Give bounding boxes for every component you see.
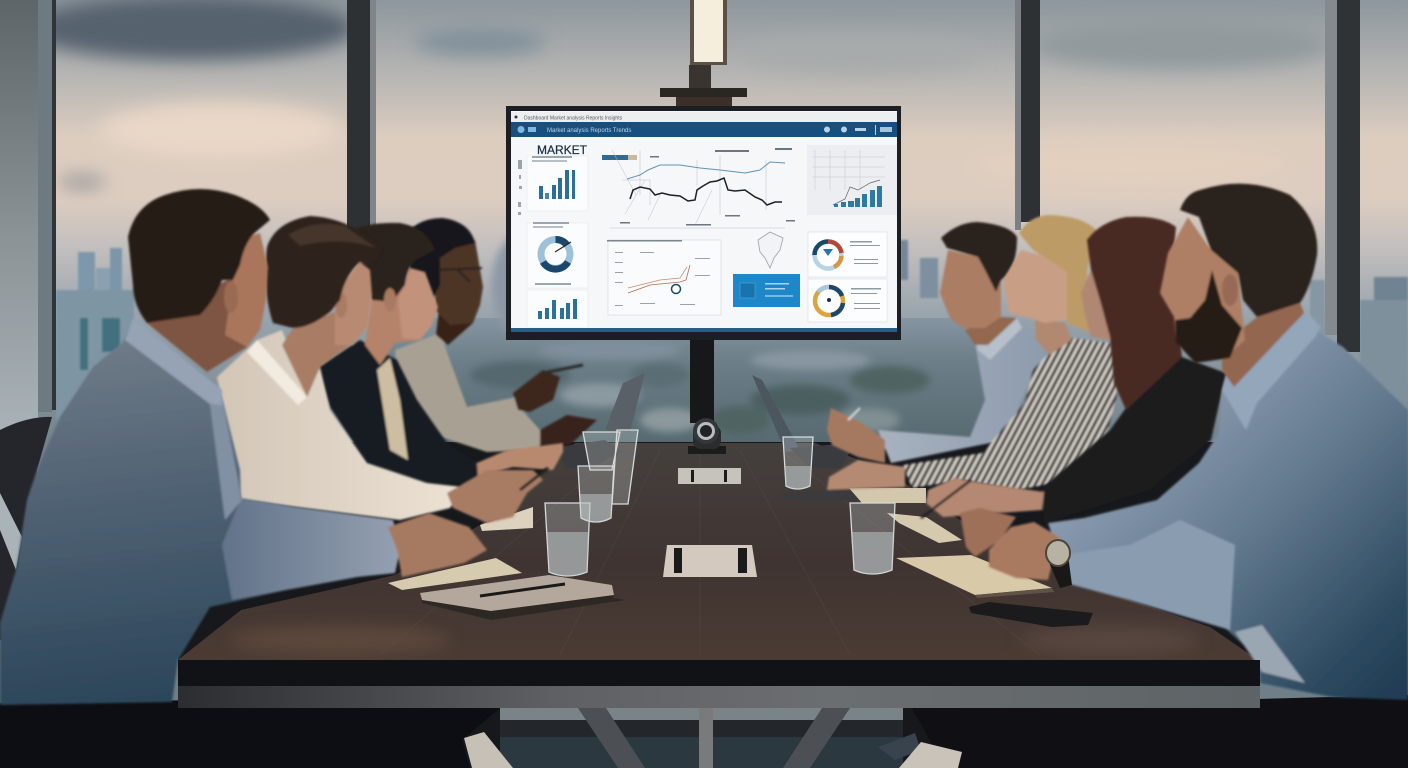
notebooks left: [388, 507, 625, 620]
gauge card: [527, 222, 588, 288]
top right mini table and chart card: [807, 145, 897, 215]
display stand and camera: [688, 338, 726, 454]
bar chart card: top left: [527, 156, 588, 211]
person: man in blue shirt, front left: [0, 189, 487, 705]
network map icon: [758, 232, 783, 268]
lower table chart: [607, 240, 721, 315]
laptop left: [557, 373, 645, 468]
person: woman in black jacket: [317, 223, 563, 483]
person: blonde woman in striped blouse: [827, 215, 1120, 490]
display browser bar: Dashboard Market analysis Reports Insights: [524, 116, 623, 122]
ceiling light and mount: [660, 0, 747, 107]
person: brunette woman in black jacket: [921, 217, 1226, 523]
person: woman in cream blouse: [217, 216, 548, 523]
display heading: MARKET: [537, 143, 588, 157]
notebooks right: [781, 488, 1054, 598]
display footer: [511, 328, 897, 332]
wristwatch: [1046, 540, 1072, 588]
person: man in grey-blue shirt, far right: [827, 222, 1045, 463]
blue callout: [733, 274, 800, 307]
wall display: [506, 106, 901, 340]
display header bar: Market analysis Reports Trends: [547, 128, 631, 134]
display header bar: [511, 122, 897, 137]
water glasses: [545, 430, 895, 576]
laptop right: [752, 375, 850, 468]
window frames and wall: [0, 0, 1360, 430]
wall sliver beside the chair: [0, 493, 22, 570]
main line chart: [602, 148, 795, 228]
chair left: [0, 417, 52, 640]
table front edge: [178, 660, 1260, 708]
table placards: [663, 468, 757, 577]
display browser bar: [511, 112, 897, 122]
trousers of seated people: [0, 695, 1408, 768]
table top: [178, 443, 1258, 660]
smartphone: [969, 602, 1093, 627]
donut card: bottom: [808, 279, 887, 322]
left rail icons: [518, 160, 522, 215]
person: man with glasses, far left: [395, 218, 597, 452]
donut card: top: [808, 232, 887, 277]
small bar chart card: [527, 283, 588, 328]
person: bearded man, front right: [960, 184, 1408, 700]
under-table floor, bench and legs: [178, 442, 1260, 768]
